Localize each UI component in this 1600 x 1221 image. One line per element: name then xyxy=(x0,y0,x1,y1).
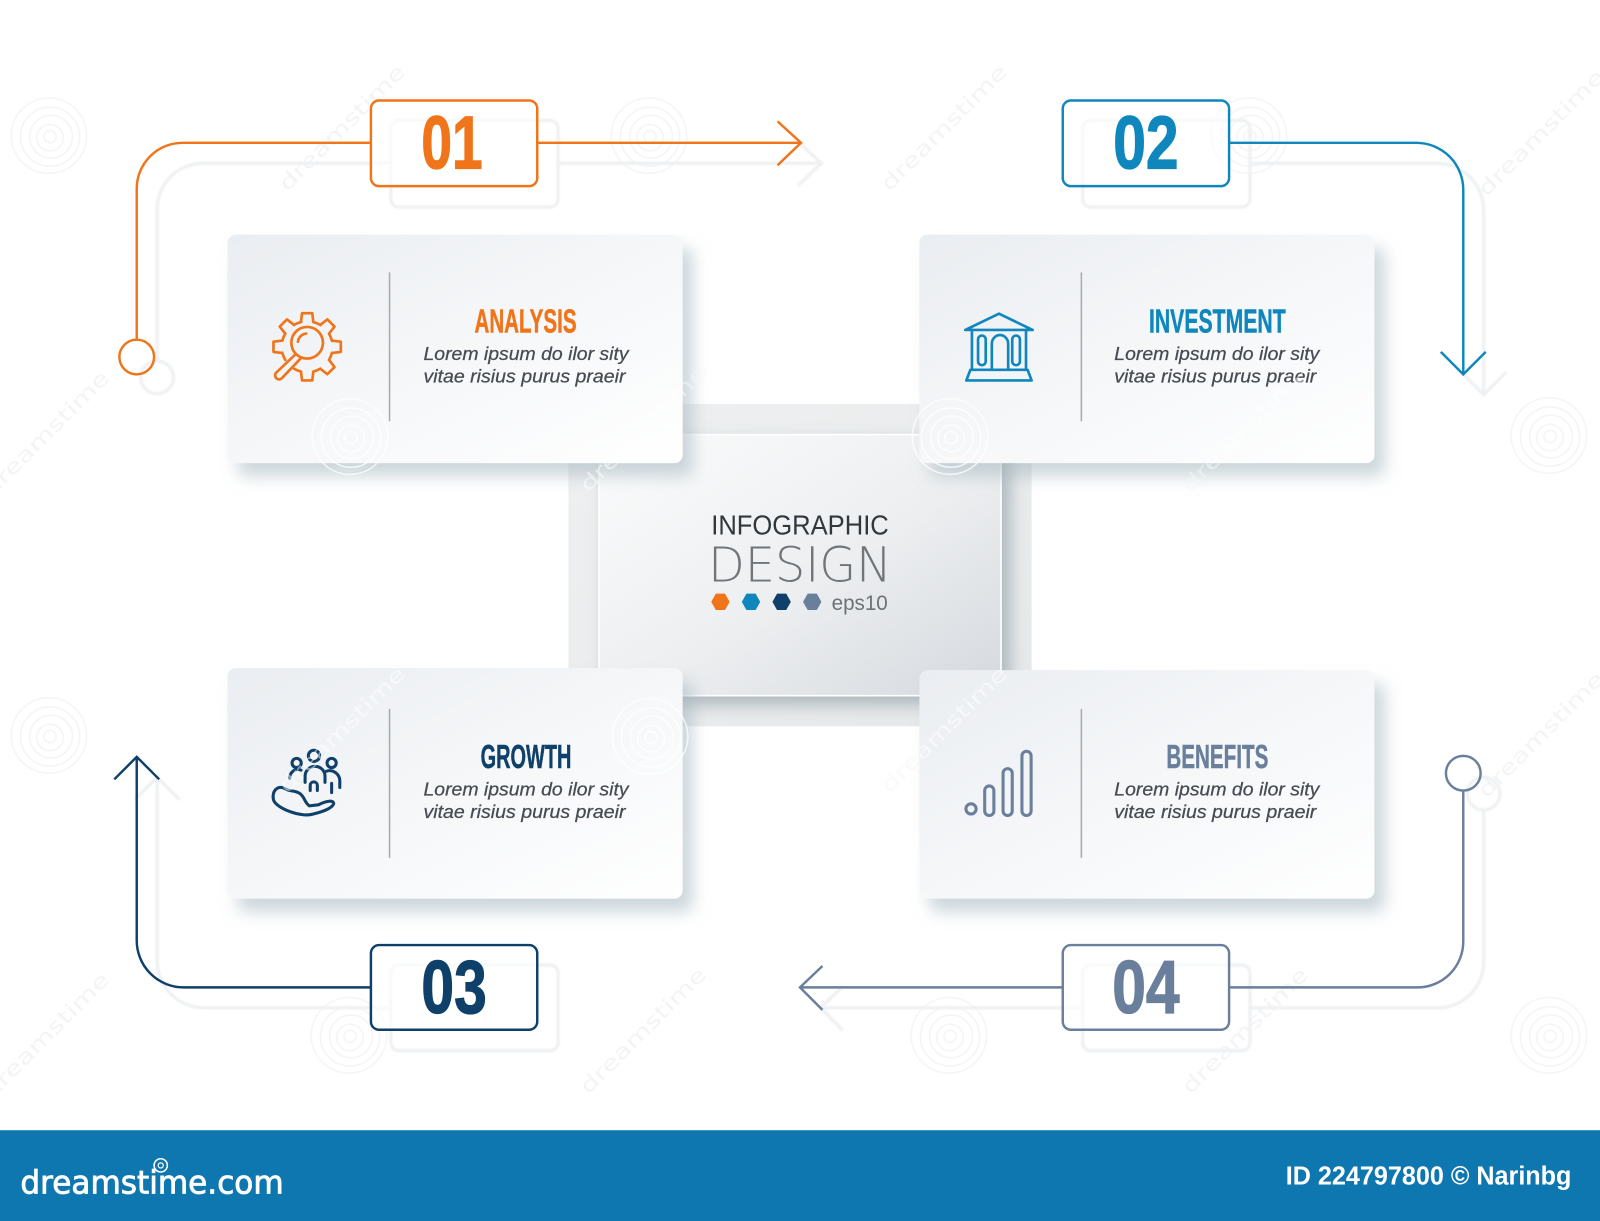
body text: vitae risius purus praeir xyxy=(423,801,626,822)
icon: rising bars xyxy=(966,751,1031,816)
body text: Lorem ipsum do ilor sity xyxy=(423,779,630,800)
panel: benefits xyxy=(919,670,1374,899)
body text xyxy=(423,779,630,822)
watermark spirals, upper layer xyxy=(312,399,988,774)
number box 04: 04 xyxy=(1112,945,1180,1029)
footer credit: ID 224797800 © Narinbg xyxy=(1286,1162,1571,1190)
panel: analysis xyxy=(228,235,683,463)
watermark text, lower layer: dreamstime xyxy=(876,60,1012,196)
center title: DESIGN xyxy=(708,537,892,593)
number box 04 xyxy=(1063,945,1229,1030)
watermark text, upper layer: dreamstime xyxy=(876,661,1012,797)
number box 03: 03 xyxy=(421,945,487,1029)
watermark text, upper layer: dreamstime xyxy=(274,661,410,797)
watermark text, lower layer: dreamstime xyxy=(1473,667,1600,803)
watermark text, lower layer: dreamstime xyxy=(274,661,410,797)
divider xyxy=(1081,709,1082,858)
body text: vitae risius purus praeir xyxy=(423,366,626,387)
watermark text, upper layer: dreamstime xyxy=(1177,361,1313,497)
body text: Lorem ipsum do ilor sity xyxy=(423,343,630,364)
arrow 02 xyxy=(1230,143,1486,374)
divider xyxy=(389,709,390,858)
panel: investment xyxy=(919,235,1374,463)
center title xyxy=(708,510,892,593)
watermark text, upper layer xyxy=(274,361,1313,797)
watermark spirals, lower layer xyxy=(11,98,1587,1073)
colour hexagons and eps10 xyxy=(711,591,888,615)
card background xyxy=(919,235,1374,463)
watermark text, upper layer: dreamstime xyxy=(575,361,711,497)
body text: vitae risius purus praeir xyxy=(1114,801,1317,822)
number box 03 xyxy=(371,945,537,1030)
divider xyxy=(1081,272,1082,421)
footer bar xyxy=(0,1130,1600,1221)
watermark text, lower layer: dreamstime xyxy=(1473,65,1600,201)
divider xyxy=(389,272,390,421)
body text xyxy=(423,343,630,387)
number box 01 xyxy=(371,100,537,186)
heading: INVESTMENT xyxy=(1149,304,1286,341)
number box 02: 02 xyxy=(1113,100,1179,184)
heading: ANALYSIS xyxy=(474,304,577,341)
number box 01: 01 xyxy=(421,100,483,184)
card background xyxy=(228,235,683,463)
center panel xyxy=(568,404,1032,726)
watermark text, lower layer: dreamstime xyxy=(1177,962,1313,1098)
ghost arrows and boxes xyxy=(135,120,1506,1051)
footer background xyxy=(0,1130,1600,1221)
footer logo: dreamstime.com xyxy=(20,1165,284,1201)
watermark text, lower layer: dreamstime xyxy=(1177,361,1313,497)
arrow 01 xyxy=(119,121,801,374)
center title: INFOGRAPHIC xyxy=(711,510,889,541)
heading: BENEFITS xyxy=(1166,739,1268,776)
arrow 04 xyxy=(800,756,1481,1010)
body text xyxy=(1114,779,1321,822)
icon: gear with magnifier xyxy=(273,313,341,380)
arrow 03 xyxy=(114,757,370,987)
body text xyxy=(1114,343,1321,387)
body text: Lorem ipsum do ilor sity xyxy=(1114,343,1321,364)
colour hexagons and eps10: eps10 xyxy=(832,591,888,615)
body text: vitae risius purus praeir xyxy=(1114,366,1317,387)
heading: GROWTH xyxy=(481,739,571,776)
watermark text, lower layer: dreamstime xyxy=(575,361,711,497)
panel: growth xyxy=(228,668,683,899)
watermark text, lower layer: dreamstime xyxy=(575,962,711,1098)
card background xyxy=(228,668,683,899)
center outer frame xyxy=(568,404,1032,726)
body text: Lorem ipsum do ilor sity xyxy=(1114,779,1321,800)
icon: bank building xyxy=(965,314,1033,380)
card background xyxy=(919,670,1374,899)
number box 02 xyxy=(1063,100,1229,186)
watermark text, lower layer: dreamstime xyxy=(274,60,410,196)
watermark text, lower layer: dreamstime xyxy=(876,661,1012,797)
icon: hand holding people xyxy=(273,750,340,815)
center inner square xyxy=(599,435,1001,696)
